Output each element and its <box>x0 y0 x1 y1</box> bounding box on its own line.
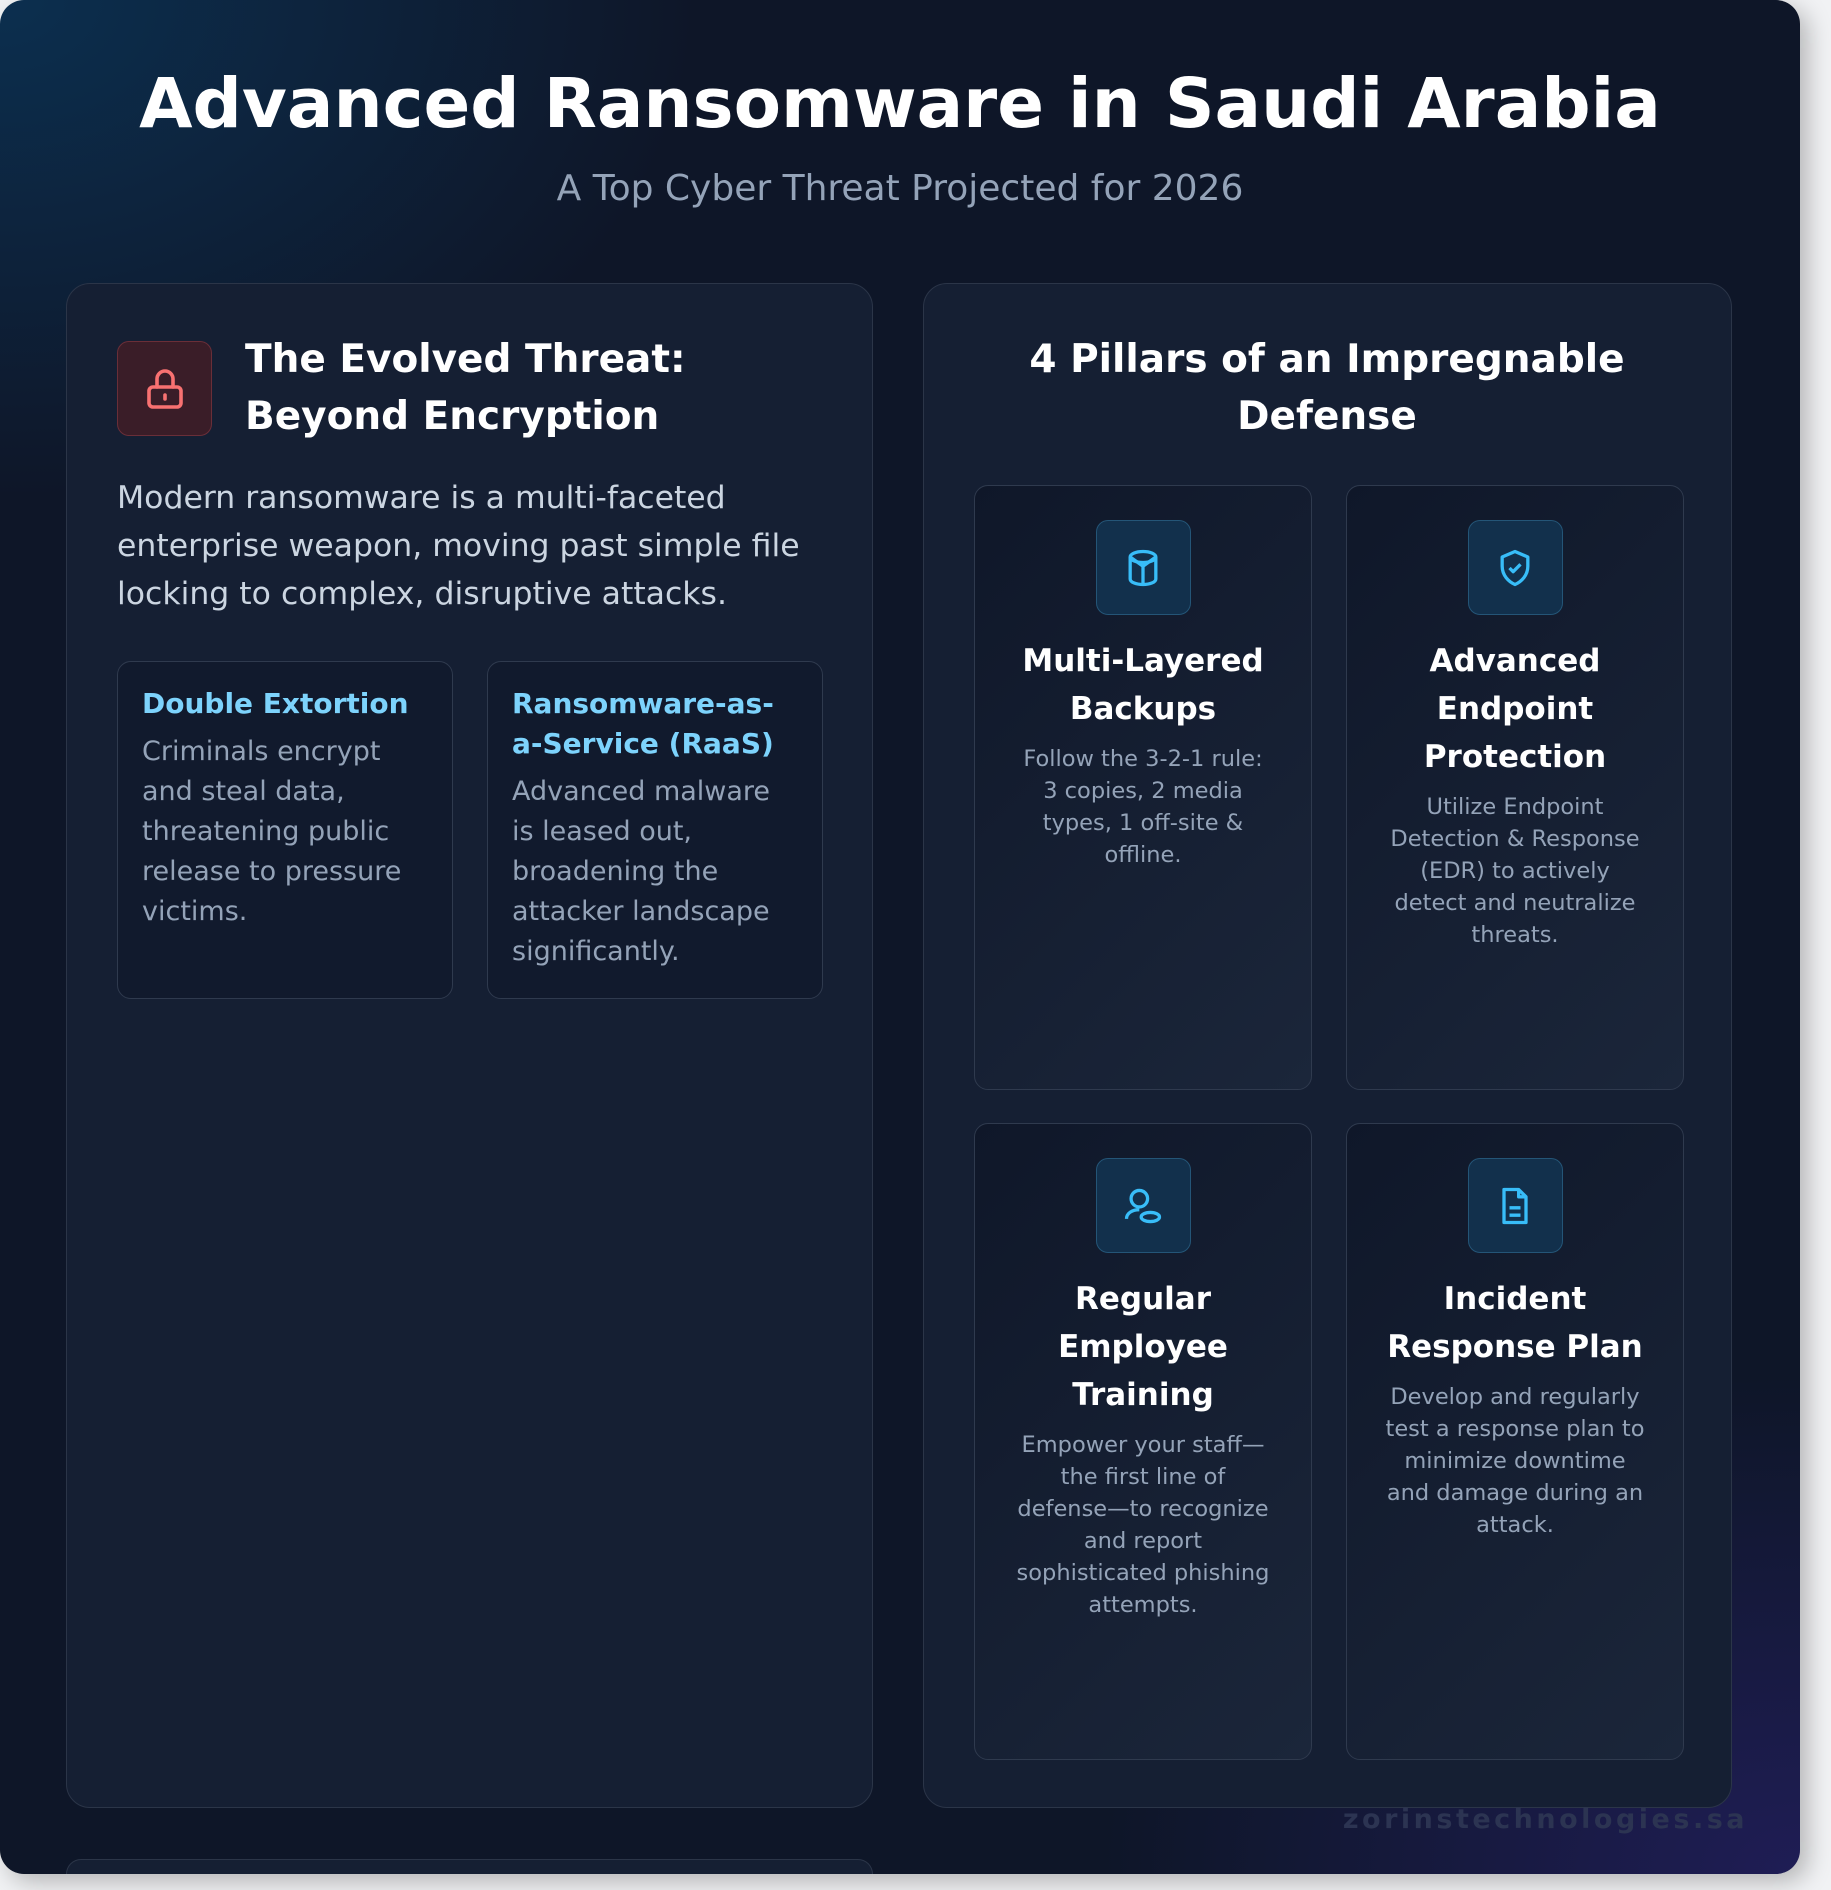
icon: user <box>1096 1158 1190 1253</box>
icon: cylinder <box>1096 520 1190 615</box>
panel: 4 pillars <box>923 283 1732 1808</box>
watermark: zorinstechnologies.sa <box>1343 1804 1748 1835</box>
pillar: backups: Multi-Layered Backups <box>1022 643 1264 727</box>
bottom panel (clipped) <box>66 1859 873 1874</box>
heading: The Evolved Threat: <box>245 337 686 382</box>
card: RaaS: Advanced malware is leased out, broadening the attacker landscape significantly. <box>512 776 770 967</box>
pillar: endpoint: Advanced Endpoint Protection <box>1424 643 1606 775</box>
icon: document <box>1468 1158 1562 1253</box>
heading: Beyond Encryption <box>245 394 659 439</box>
heading: Defense <box>1237 394 1417 439</box>
pillar: training: Empower your staff—the first line of defense—to recognize and report sophisticated phishing attempts. <box>1017 1432 1269 1618</box>
heading <box>1029 337 1625 439</box>
heading: 4 Pillars of an Impregnable <box>1029 337 1625 382</box>
title: Advanced Ransomware in Saudi Arabia <box>139 64 1661 144</box>
pillar: backups <box>974 485 1312 1090</box>
card: double extortion <box>117 661 453 999</box>
card: RaaS <box>487 661 823 999</box>
pillar: training: Regular Employee Training <box>1058 1281 1228 1413</box>
heading <box>245 337 686 439</box>
pillar: incident response <box>1346 1123 1684 1760</box>
subtitle: A Top Cyber Threat Projected for 2026 <box>557 168 1243 209</box>
card: double extortion: Double Extortion <box>142 687 409 720</box>
icon: shield <box>1468 520 1562 615</box>
card: RaaS: Ransomware-as-a-Service (RaaS) <box>512 687 774 760</box>
icon: lock <box>117 341 212 436</box>
pillar: backups: Follow the 3-2-1 rule: 3 copies, 2 media types, 1 off-site & offline. <box>1023 746 1263 868</box>
card: double extortion: Criminals encrypt and steal data, threatening public release to pressure victims. <box>142 736 401 927</box>
pillar: endpoint <box>1346 485 1684 1090</box>
pillar: endpoint: Utilize Endpoint Detection & Response (EDR) to actively detect and neutralize threats. <box>1390 794 1640 948</box>
panel: evolved threat <box>66 283 873 1808</box>
pillar: incident response: Incident Response Plan <box>1387 1281 1643 1365</box>
pillar: training <box>974 1123 1312 1760</box>
intro text: Modern ransomware is a multi-faceted enterprise weapon, moving past simple file locking to complex, disruptive attacks. <box>117 480 800 612</box>
pillar: incident response: Develop and regularly test a response plan to minimize downtime and damage during an attack. <box>1386 1384 1644 1538</box>
